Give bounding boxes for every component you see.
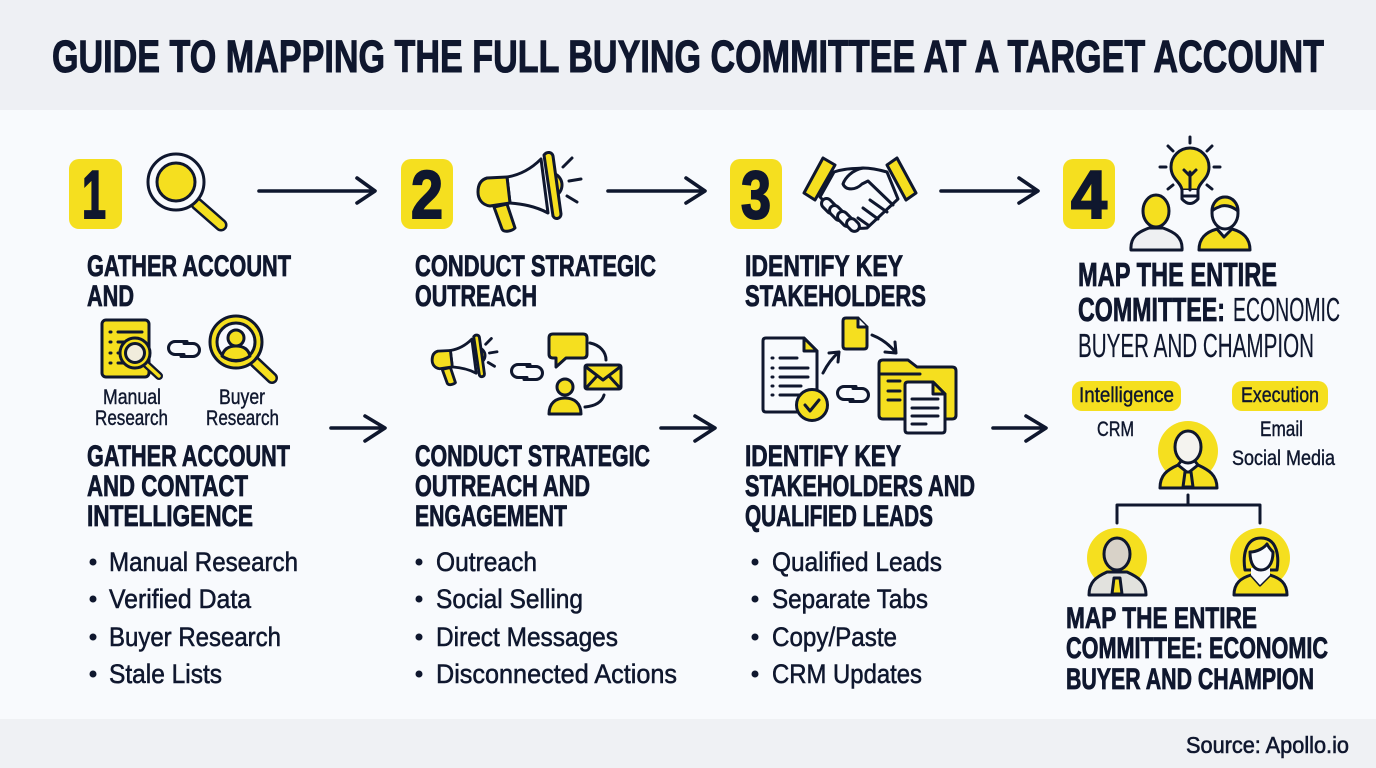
icon: arrow up to document <box>823 352 839 373</box>
label: manual research <box>95 386 168 430</box>
step 1 bullet list: Stale Lists <box>109 659 222 689</box>
step 3 subheading: STAKEHOLDERS AND <box>745 470 975 503</box>
arrow: step 3 to step 4 <box>941 178 1038 203</box>
step 3 number badge: 3 <box>741 157 771 233</box>
pill: intelligence <box>1072 381 1181 411</box>
icon: connecting arcs <box>585 343 606 407</box>
icon: buyer magnifier <box>210 316 272 378</box>
label: CRM: CRM <box>1097 418 1134 441</box>
pill: execution: Execution <box>1241 384 1319 407</box>
step 2 heading: OUTREACH <box>415 280 537 313</box>
panel: step 2 <box>401 152 677 689</box>
step 2 subheading: CONDUCT STRATEGIC <box>415 440 650 473</box>
step 4 number badge: 4 <box>1071 157 1107 233</box>
label: email and social media: Social Media <box>1232 447 1335 470</box>
label: buyer research: Research <box>206 407 279 430</box>
label: buyer research <box>206 386 279 430</box>
step 1 bullet list: Buyer Research <box>109 622 281 652</box>
step 1 subheading: AND CONTACT <box>87 470 248 503</box>
icon: link <box>168 342 200 356</box>
icon: person right <box>1199 197 1250 250</box>
arrow: step 2 to step 3 <box>608 178 705 203</box>
icon: link <box>838 386 868 402</box>
label: buyer research: Buyer <box>219 386 265 409</box>
icon: megaphone <box>478 152 581 231</box>
panel: step 3 <box>730 157 975 689</box>
step 3 bullet list: CRM Updates <box>772 659 922 689</box>
step 1 heading <box>87 250 291 313</box>
icon: small document <box>843 318 867 349</box>
step 1 subheading: GATHER ACCOUNT <box>87 440 290 473</box>
icon: speech bubble <box>549 334 587 367</box>
icon: link <box>512 364 542 380</box>
step 2 number badge: 2 <box>411 157 443 233</box>
icon: magnifying glass <box>148 154 221 225</box>
step 4 heading <box>1078 256 1340 364</box>
step 4 heading: MAP THE ENTIRE <box>1078 256 1277 293</box>
source note: Source: Apollo.io <box>1186 732 1349 758</box>
step 2 subheading: ENGAGEMENT <box>415 500 567 533</box>
step 2 subheading: OUTREACH AND <box>415 470 590 503</box>
label: email and social media <box>1232 418 1335 470</box>
step 1 bullet list: Verified Data <box>109 584 252 614</box>
step 3 bullet list: Separate Tabs <box>772 584 928 614</box>
icon: handshake <box>804 158 916 233</box>
step 4 subheading: MAP THE ENTIRE <box>1066 602 1257 635</box>
step 2 heading <box>415 250 656 313</box>
step 2 bullet list: Outreach <box>436 547 537 577</box>
step 2 heading: CONDUCT STRATEGIC <box>415 250 656 283</box>
panel: step 4 <box>1063 137 1340 696</box>
step 1 number badge: 1 <box>82 157 106 233</box>
icon: champion <box>1230 528 1290 595</box>
icon: manager <box>1087 528 1147 595</box>
icon: checklist document <box>763 338 828 420</box>
step 2 bullet list <box>416 547 677 689</box>
icon: economic buyer <box>1158 421 1218 488</box>
icon: folder with document <box>879 360 956 433</box>
label: manual research: Research <box>95 407 168 430</box>
org chart connector <box>1117 495 1260 523</box>
step 1 bullet list: Manual Research <box>109 547 298 577</box>
pill: intelligence: Intelligence <box>1079 384 1174 407</box>
icon: research document <box>102 320 159 377</box>
icon: person <box>549 379 581 414</box>
step 3 bullet list <box>752 547 942 689</box>
step 2 bullet list: Social Selling <box>436 584 583 614</box>
pill: execution <box>1232 381 1328 411</box>
step 3 heading: IDENTIFY KEY <box>745 250 903 283</box>
step 3 subheading: QUALIFIED LEADS <box>745 500 933 533</box>
step 3 subheading <box>745 440 975 533</box>
step 1 subheading <box>87 440 290 533</box>
step 4 heading: COMMITTEE: <box>1078 291 1225 328</box>
icon: envelope <box>585 365 621 389</box>
step 1 heading: GATHER ACCOUNT <box>87 250 291 283</box>
arrow: step 1 to step 2 <box>259 178 375 203</box>
step 2 bullet list: Direct Messages <box>436 622 618 652</box>
step 2 bullet list: Disconnected Actions <box>436 659 677 689</box>
step 1 subheading: INTELLIGENCE <box>87 500 253 533</box>
icon: light bulb <box>1160 137 1220 204</box>
icon: curved arrow to folder <box>872 335 896 353</box>
step 1 bullet list <box>90 547 298 689</box>
label: email and social media: Email <box>1260 418 1303 441</box>
step 2 subheading <box>415 440 650 533</box>
label: manual research: Manual <box>103 386 161 409</box>
panel: step 1 <box>69 154 298 689</box>
step 1 heading: AND <box>87 280 134 313</box>
icon: small megaphone <box>432 335 497 385</box>
arrow: lower step 3 to step 4 <box>993 416 1046 441</box>
arrow: lower step 2 to step 3 <box>661 416 715 441</box>
footer band <box>0 719 1376 768</box>
step 3 subheading: IDENTIFY KEY <box>745 440 901 473</box>
step 4 subheading <box>1066 602 1328 696</box>
arrow: lower step 1 to step 2 <box>331 416 385 441</box>
step 3 heading <box>745 250 926 313</box>
step 3 bullet list: Copy/Paste <box>772 622 897 652</box>
step 3 bullet list: Qualified Leads <box>772 547 942 577</box>
header band <box>0 0 1376 110</box>
step 3 heading: STAKEHOLDERS <box>745 280 926 313</box>
icon: person left <box>1131 195 1182 250</box>
